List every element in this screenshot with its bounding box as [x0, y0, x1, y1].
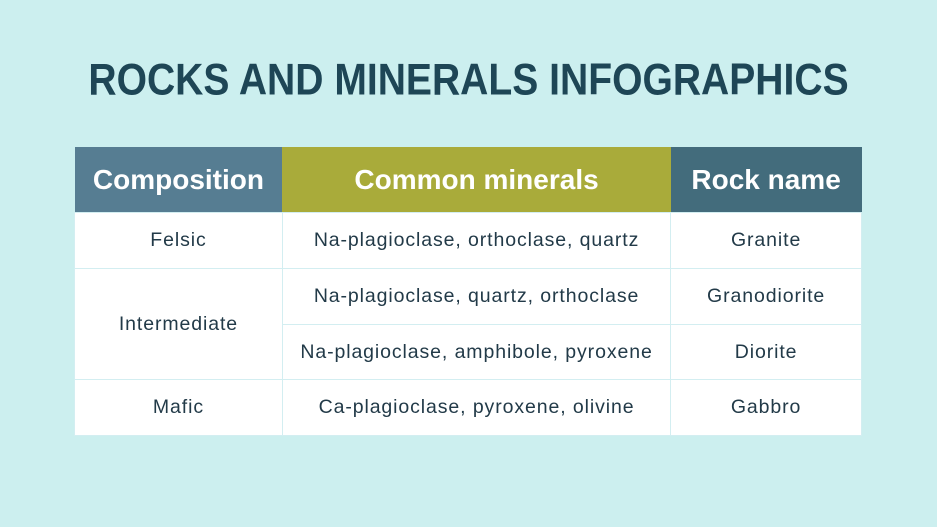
table: Common minerals — [354, 164, 599, 194]
table: Ca-plagioclase, pyroxene, olivine — [319, 396, 634, 418]
table: Diorite — [735, 340, 797, 362]
table: Na-plagioclase, quartz, orthoclase — [314, 285, 639, 307]
table: Rock name — [691, 164, 841, 194]
table: Mafic — [153, 396, 204, 418]
title: ROCKS AND MINERALS INFOGRAPHICS — [88, 55, 849, 104]
table: Na-plagioclase, amphibole, pyroxene — [300, 340, 653, 362]
table: Felsic — [150, 229, 207, 251]
table: Na-plagioclase, orthoclase, quartz — [314, 229, 639, 251]
table: Intermediate — [119, 312, 238, 334]
table: Granite — [731, 229, 801, 251]
table — [75, 147, 862, 435]
table: Granodiorite — [707, 285, 825, 307]
table: Composition — [93, 164, 264, 194]
table: Gabbro — [731, 396, 801, 418]
